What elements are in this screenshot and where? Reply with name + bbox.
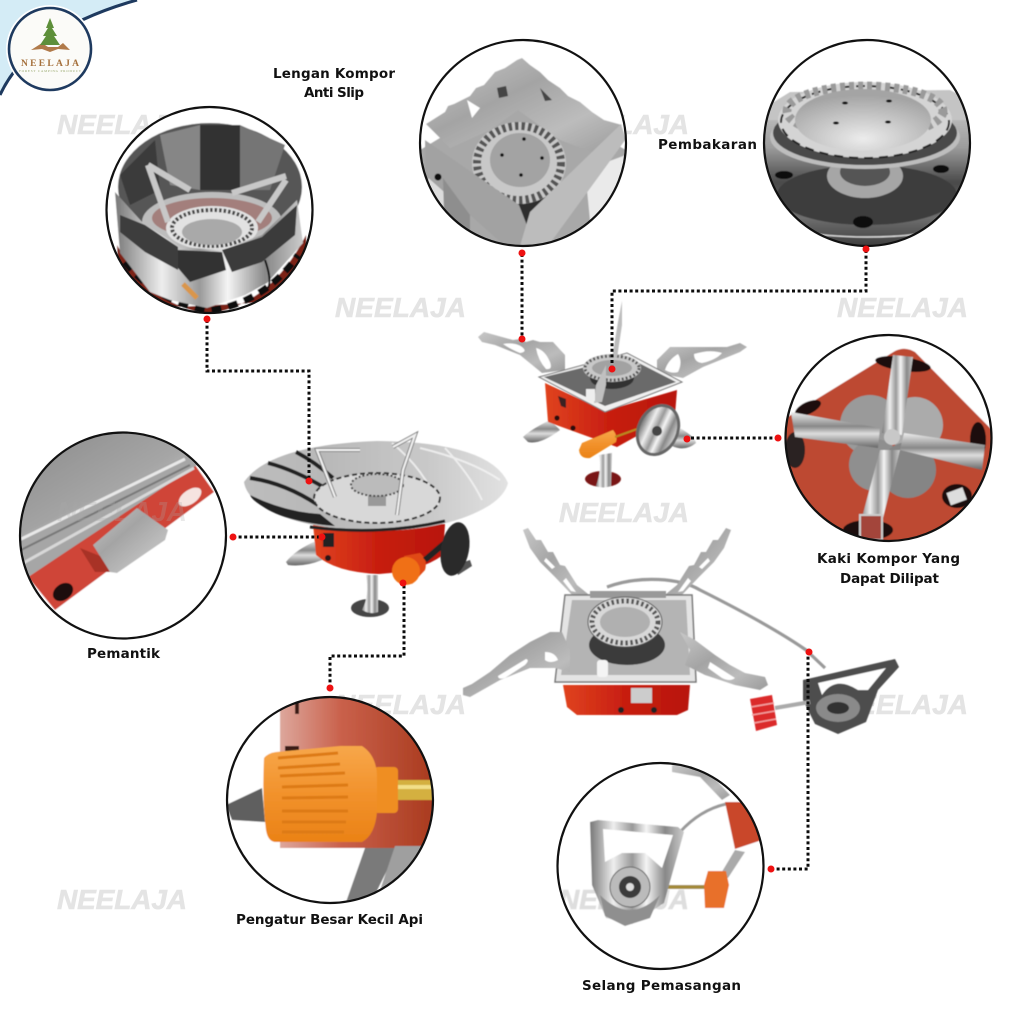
detail circle: igniter bbox=[15, 430, 226, 639]
right arm bbox=[657, 343, 747, 378]
watermarks bbox=[57, 109, 968, 915]
connector: knob bbox=[330, 584, 404, 688]
detail circle: igniter: NEELAJA bbox=[57, 496, 187, 527]
detail circle: arm close-up bbox=[420, 40, 626, 246]
orange knob bbox=[404, 553, 426, 584]
tab bbox=[93, 508, 168, 573]
knob bbox=[374, 767, 398, 813]
red strip bbox=[28, 465, 214, 610]
label: arm: Anti Slip bbox=[304, 85, 364, 101]
igniter bbox=[597, 660, 608, 677]
detail circle: hose connector: NEELAJA bbox=[559, 884, 689, 915]
dial bbox=[628, 397, 688, 463]
connector: arm bbox=[520, 254, 524, 339]
left arm bbox=[478, 332, 565, 373]
body bbox=[545, 383, 677, 447]
handle bbox=[590, 820, 684, 924]
connector: hose bbox=[771, 652, 808, 869]
handle bbox=[803, 659, 899, 734]
hose bbox=[607, 579, 825, 668]
label: igniter: Pemantik bbox=[87, 646, 161, 662]
panel bbox=[280, 696, 435, 848]
screw bbox=[52, 582, 74, 602]
watermarks: NEELAJA bbox=[559, 109, 689, 140]
label: legs bbox=[817, 551, 960, 587]
holes bbox=[775, 171, 793, 179]
label: hose: Selang Pemasangan bbox=[582, 978, 741, 994]
bowl bbox=[244, 441, 508, 531]
body bbox=[765, 120, 969, 245]
connector: burner bbox=[612, 250, 866, 369]
label: burner: Pembakaran bbox=[658, 137, 757, 153]
body bbox=[563, 685, 690, 715]
watermarks: NEELAJA bbox=[335, 292, 466, 323]
rail bbox=[15, 455, 197, 577]
red block bbox=[725, 802, 762, 849]
scalloped burner bbox=[778, 82, 952, 158]
detail circle: burner bbox=[764, 40, 970, 246]
slots bbox=[874, 356, 932, 372]
brass bbox=[395, 780, 435, 800]
label: legs: Kaki Kompor Yang bbox=[817, 551, 960, 567]
watermarks: NEELAJA bbox=[335, 689, 466, 720]
leg bbox=[346, 847, 395, 900]
crossing arms bbox=[424, 140, 527, 232]
label: legs: Dapat Dilipat bbox=[840, 571, 940, 587]
icon: mountains bbox=[31, 43, 70, 52]
floor bbox=[142, 192, 282, 252]
top arms bbox=[523, 528, 590, 610]
detail circle: windscreen interior bbox=[106, 107, 313, 314]
red knob bbox=[775, 702, 810, 708]
watermarks: NEELAJA bbox=[559, 497, 689, 528]
label: arm bbox=[273, 66, 395, 101]
connector: windscreen bbox=[207, 320, 309, 481]
dish bbox=[21, 434, 186, 535]
burner bbox=[589, 625, 665, 665]
label: arm: Lengan Kompor bbox=[273, 66, 395, 82]
side feet bbox=[523, 420, 560, 442]
detail circle: hose connector bbox=[557, 762, 764, 969]
icon: pine tree bbox=[40, 18, 60, 45]
logo bbox=[6, 5, 94, 93]
petals bbox=[840, 394, 887, 450]
upright blades bbox=[612, 301, 622, 358]
side feet bbox=[286, 540, 322, 565]
hose bbox=[680, 804, 726, 832]
interior bbox=[117, 122, 303, 222]
leg bbox=[585, 471, 621, 487]
pot supports bbox=[317, 435, 415, 515]
watermarks: NEELAJA bbox=[837, 689, 968, 720]
sky corner arc bbox=[0, 0, 137, 95]
serrated top bbox=[426, 58, 622, 142]
label: knob: Pengatur Besar Kecil Api bbox=[236, 912, 423, 928]
lower body bbox=[421, 110, 625, 243]
logo tagline: FOREST CAMPING PRODUCT bbox=[19, 69, 82, 73]
rim bbox=[117, 235, 310, 314]
connector: legs bbox=[687, 436, 778, 440]
knob bbox=[579, 430, 617, 458]
connector: igniter bbox=[233, 536, 322, 538]
stove: folding square with dial bbox=[478, 301, 747, 488]
bottom arms bbox=[463, 632, 570, 697]
watermarks: NEELAJA bbox=[57, 884, 187, 915]
rod bbox=[668, 885, 708, 889]
watermarks: NEELAJA bbox=[837, 292, 968, 323]
watermarks: NEELAJA bbox=[57, 109, 187, 140]
detail circle: orange knob bbox=[226, 696, 435, 905]
plate bbox=[555, 595, 696, 682]
inner plate bbox=[314, 473, 440, 523]
bars bbox=[882, 355, 913, 435]
red markers bbox=[204, 246, 870, 872]
detail circle: folding legs bbox=[785, 334, 992, 545]
front band bbox=[115, 192, 303, 308]
top arm bbox=[672, 765, 730, 800]
pot supports bbox=[148, 165, 286, 222]
burner bbox=[472, 122, 566, 204]
logo wordmark: NEELAJA bbox=[21, 59, 79, 69]
foot bbox=[226, 788, 265, 822]
burner bbox=[590, 367, 634, 389]
plate bbox=[539, 353, 682, 412]
stove: windscreen bbox=[244, 435, 508, 617]
body bbox=[313, 524, 445, 574]
knob bbox=[704, 871, 729, 908]
leg bbox=[351, 599, 389, 617]
stove: open with hose bbox=[463, 528, 899, 734]
dial bbox=[425, 542, 446, 560]
dish bbox=[770, 130, 960, 170]
red base bbox=[785, 349, 992, 545]
burner bbox=[368, 490, 386, 506]
